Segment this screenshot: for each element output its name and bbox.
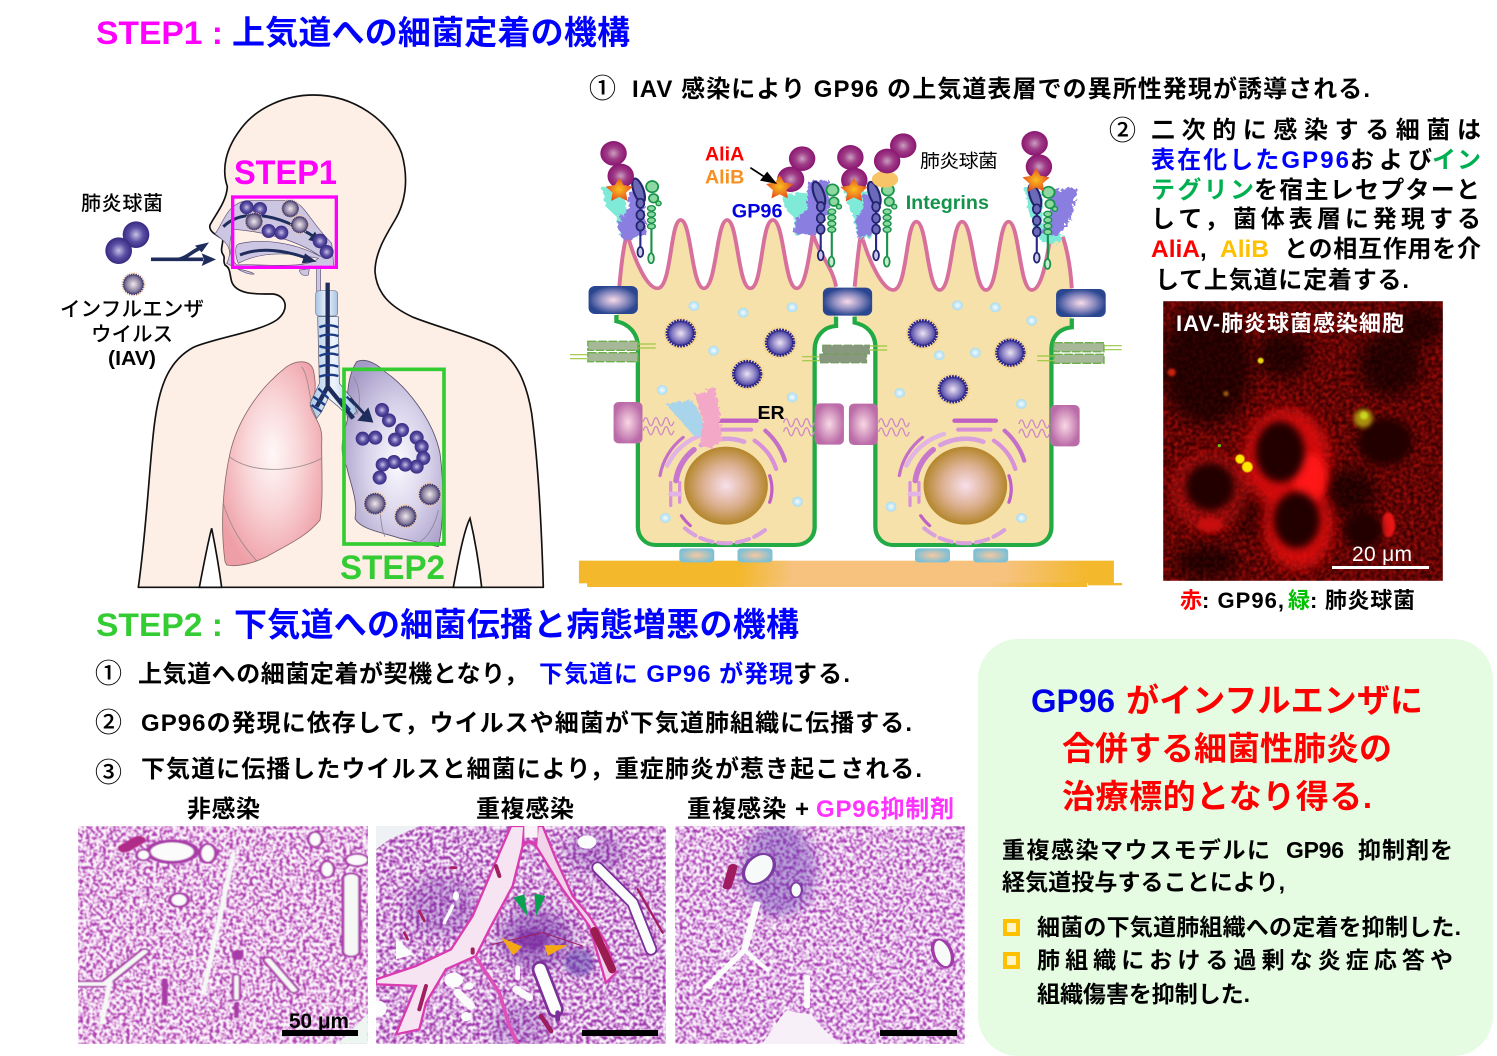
scale label 20 um: 20 μm <box>1352 543 1412 566</box>
receptor beads <box>630 177 1057 269</box>
conclusion bullets: 細菌の下気道肺組織への定着を抑制した. <box>1037 914 1461 940</box>
lung bacteria chain <box>356 403 430 485</box>
bacterium signals <box>1168 358 1373 472</box>
label pneumococcus: 肺炎球菌 <box>920 151 998 172</box>
text: step 2 list: 上気道への細菌定着が契機となり， <box>138 660 528 688</box>
scale bar with label <box>282 1014 358 1036</box>
throat detail <box>237 268 309 276</box>
vesicles <box>657 300 1037 523</box>
pneumococci on surface <box>600 131 1052 192</box>
arrow to AliA <box>750 168 777 184</box>
label: influenza virus <box>60 298 204 370</box>
conclusion heading: 合併する細菌性肺炎の <box>1062 730 1392 767</box>
entry arrow <box>151 242 216 266</box>
arrow into lung <box>350 398 373 423</box>
label: STEP2 in body: STEP2 <box>340 549 445 587</box>
text: step 2 list: 下気道に GP96 が発現 <box>539 660 793 688</box>
diagram: epithelial cells <box>570 131 1122 587</box>
scale bar <box>880 1030 957 1036</box>
conclusion bullets: 組織傷害を抑制した. <box>1037 981 1250 1007</box>
conclusion heading: がインフルエンザに <box>1126 682 1423 719</box>
text: point 2: 二次的に感染する細菌は <box>1151 117 1481 144</box>
conclusion bullets <box>1037 914 1461 1007</box>
histology: coinfected with GP96 inhibitor <box>675 823 965 1044</box>
text: step 2 list <box>95 659 922 788</box>
text: point 1: ① <box>589 74 616 104</box>
text: point 2: ② <box>1109 116 1136 146</box>
right lung fissures <box>353 377 438 543</box>
micrograph caption <box>1180 588 1415 613</box>
scale bar <box>1332 566 1429 569</box>
text: point 2 <box>1109 116 1481 294</box>
influenza virus icon <box>122 273 145 296</box>
micrograph label: IAV-肺炎球菌感染細胞 <box>1176 311 1404 336</box>
AliB binding <box>872 171 898 188</box>
text: point 1: IAV 感染により GP96 の上気道表層での異所性発現が誘導される. <box>632 75 1370 103</box>
bright cytoplasm <box>1170 408 1333 570</box>
nuclei <box>684 447 1007 525</box>
text: point 2: テグリン <box>1151 176 1254 204</box>
left lung pink <box>223 362 322 566</box>
text: step 2 list: ② <box>95 708 122 738</box>
micrograph caption: : GP96, <box>1202 588 1284 613</box>
micrograph caption: 赤 <box>1180 588 1202 613</box>
text: step 2 list: 下気道に伝播したウイルスと細菌により，重症肺炎が惹き起こされる. <box>141 755 922 783</box>
conclusion intro: 抑制剤を <box>1358 837 1453 863</box>
text: point 2: , <box>1200 236 1207 263</box>
micrograph caption: 緑 <box>1288 588 1310 613</box>
text: point 2: して，菌体表層に発現する <box>1151 206 1481 233</box>
heading: STEP2: STEP2 : <box>96 607 223 643</box>
histology captions: GP96抑制剤 <box>816 796 954 823</box>
text: point 2: および <box>1350 147 1432 174</box>
label: pneumococcus: 肺炎球菌 <box>81 192 163 215</box>
text: point 2: との相互作用を介 <box>1284 236 1481 263</box>
histology captions: 非感染 <box>187 796 260 823</box>
text: point 2: を宿主レセプターと <box>1254 177 1480 204</box>
right cell <box>854 222 1072 545</box>
dark regions <box>1162 305 1443 578</box>
label: influenza virus: インフルエンザ <box>60 298 204 321</box>
text: step 2 list: GP96の発現に依存して，ウイルスや細菌が下気道肺組織に伝播する. <box>141 709 912 737</box>
left lung fissures <box>223 367 322 561</box>
bullet squares <box>1005 921 1018 967</box>
text: step 2 list: ③ <box>95 758 122 788</box>
histology captions <box>187 796 954 823</box>
nuclei <box>1185 418 1413 549</box>
conclusion intro: 経気道投与することにより, <box>1002 869 1285 895</box>
lung viruses <box>364 483 441 528</box>
conclusion heading: GP96 <box>1031 683 1115 719</box>
text: point 2: イン <box>1432 147 1481 174</box>
body silhouette <box>138 95 543 587</box>
tight junctions <box>589 286 1106 317</box>
diagram: human body with infection route <box>105 95 543 587</box>
conclusion heading: 治療標的となり得る. <box>1062 778 1372 815</box>
scale bar with label: 50 μm <box>289 1010 349 1033</box>
conclusion intro <box>1002 837 1453 895</box>
conclusion panel <box>978 639 1493 1056</box>
arrowheads green <box>513 894 545 917</box>
palate <box>230 229 321 265</box>
nasal airflow arrows <box>223 215 317 260</box>
pneumococcus icon <box>105 221 149 264</box>
label Integrins: Integrins <box>906 193 989 214</box>
conclusion intro: 重複感染マウスモデルに <box>1002 837 1270 863</box>
text: point 2: 表在化したGP96 <box>1151 147 1349 174</box>
text: point 2: AliB <box>1220 236 1269 263</box>
ER GP96 protein <box>666 387 722 448</box>
label: influenza virus: ウイルス <box>91 323 173 346</box>
cytoplasm viruses <box>665 319 1026 404</box>
main airway <box>376 826 524 1034</box>
text: point 2: AliA <box>1151 236 1200 263</box>
histology: coinfected lung <box>371 826 666 1049</box>
heading: STEP1: STEP1 : <box>96 15 223 51</box>
label: STEP1 in body: STEP1 <box>234 154 337 192</box>
gap junctions <box>570 341 1122 363</box>
fluorescence micrograph <box>1162 301 1443 581</box>
desmosomes <box>614 402 1080 446</box>
highlight box STEP1 <box>233 197 336 267</box>
arm gaps <box>199 518 482 587</box>
text: step 2 list: ① <box>95 659 122 689</box>
nasal bacteria and viruses <box>240 200 334 259</box>
hemidesmosomes <box>679 548 1008 562</box>
micrograph caption: : 肺炎球菌 <box>1310 588 1415 613</box>
basement membrane <box>579 561 1122 587</box>
left cell <box>616 220 836 545</box>
label AliA: AliA <box>705 144 744 165</box>
larynx <box>316 291 338 316</box>
scale bar <box>582 1030 658 1036</box>
label: influenza virus: (IAV) <box>108 347 156 370</box>
arrowheads orange <box>501 938 568 956</box>
histology captions: 重複感染 + <box>687 796 809 823</box>
right airway <box>536 826 616 983</box>
text: point 2: して上気道に定着する. <box>1155 267 1409 294</box>
highlight box STEP2 <box>344 369 444 544</box>
desmosome filaments <box>643 418 1050 437</box>
endoplasmic reticulum <box>660 421 1024 543</box>
AliA/AliB stars <box>606 168 1050 201</box>
surface receptors <box>601 181 1078 243</box>
right lung purple <box>342 360 443 547</box>
histology captions: 重複感染 <box>476 796 574 823</box>
conclusion bullets: 肺組織における過剰な炎症応答や <box>1037 947 1453 973</box>
label ER: ER <box>757 403 785 424</box>
text: step 2 list: する. <box>793 661 850 688</box>
label AliB: AliB <box>705 167 744 188</box>
label GP96: GP96 <box>732 201 782 222</box>
trachea and bronchi <box>310 283 357 418</box>
nasal cavity <box>215 201 334 297</box>
heading: STEP1: 上気道への細菌定着の機構 <box>232 14 630 51</box>
conclusion heading <box>1031 682 1423 815</box>
histology: uninfected lung <box>78 826 369 1044</box>
conclusion intro: GP96 <box>1286 837 1344 863</box>
heading: STEP2: 下気道への細菌伝播と病態増悪の機構 <box>234 606 799 643</box>
